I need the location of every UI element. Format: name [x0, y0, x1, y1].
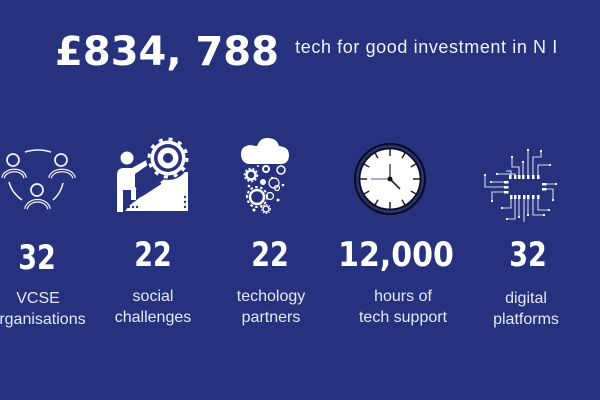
- subtitle: tech for good investment in N I: [295, 37, 558, 57]
- stat: 22 technology partners: partners: [242, 309, 300, 326]
- stat: 32 digital platforms: digital: [505, 290, 547, 307]
- stat: 22 technology partners: 22: [251, 236, 289, 275]
- stat: 32 digital platforms: 32: [509, 236, 547, 275]
- stat: 32 digital platforms: platforms: [493, 311, 559, 328]
- stat: 12,000 hours of tech support: 12,000: [338, 236, 454, 275]
- stat: 12,000 hours of tech support: hours of: [374, 288, 432, 305]
- stat: 32 VCSE organisations: 32: [18, 239, 56, 278]
- stat: 12,000 hours of tech support: tech support: [359, 309, 447, 326]
- stat: 22 social challenges: challenges: [115, 309, 191, 326]
- stat: 22 technology partners: techology: [237, 288, 305, 305]
- stat: 22 social challenges: 22: [134, 236, 172, 275]
- stat: 32 VCSE organisations: VCSE: [16, 290, 60, 307]
- stat: 22 social challenges: social: [133, 288, 173, 305]
- title: investment amount: £834, 788: [55, 29, 279, 75]
